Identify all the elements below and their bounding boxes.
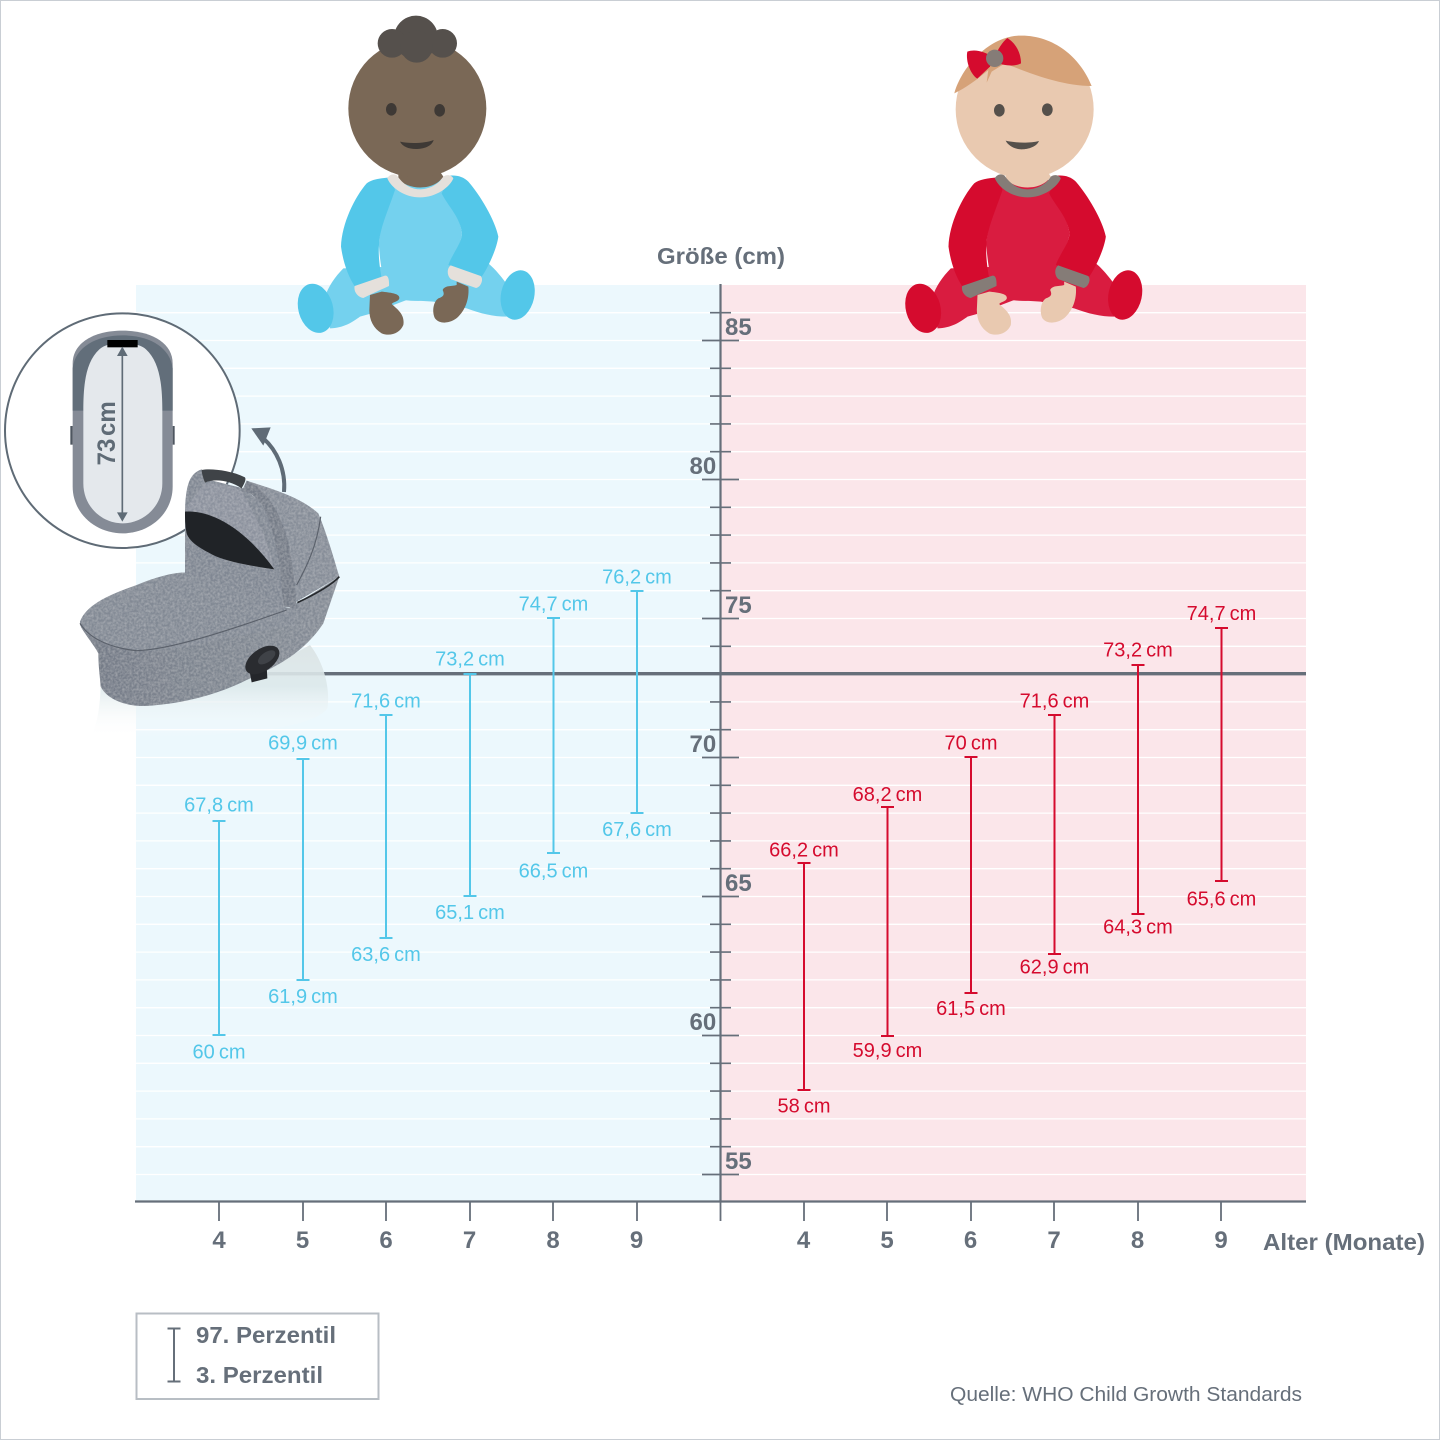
boys range: month 7: 73,2 cm	[435, 648, 505, 670]
girl bow	[967, 38, 1021, 79]
boy left hand	[369, 292, 404, 335]
inset: carrycot top view with 73 cm length	[5, 313, 240, 548]
y axis numbers: 60	[690, 1009, 716, 1036]
boy neck	[398, 167, 443, 187]
girls range: month 5: 59,9 cm	[853, 1040, 922, 1062]
legend	[136, 1314, 378, 1399]
x axis numbers: girls: 9	[1214, 1227, 1228, 1254]
girl right sleeve	[1049, 176, 1106, 277]
boy hair	[378, 16, 457, 63]
boy left cuff	[354, 276, 389, 298]
boys range: month 8: 74,7 cm	[519, 594, 588, 616]
boys range: month 7	[435, 648, 505, 924]
y axis with ticks	[702, 284, 739, 1201]
x axis numbers: girls: 5	[880, 1227, 894, 1254]
girl collar	[995, 174, 1061, 197]
y axis numbers: 85	[725, 314, 752, 341]
x axis numbers: girls: 4	[797, 1227, 811, 1254]
girl legs	[932, 263, 1121, 328]
boy head	[348, 39, 486, 177]
cot floor shadow	[90, 645, 328, 738]
boys range: month 5	[268, 732, 338, 1008]
girls range: month 8	[1103, 640, 1173, 938]
boys range: month 7: 65,1 cm	[435, 902, 505, 924]
boys range: month 4: 60 cm	[193, 1042, 245, 1064]
cot seams	[80, 517, 321, 651]
girl head	[956, 40, 1094, 178]
x axis numbers: boys: 9	[630, 1227, 643, 1254]
girls range: month 6: 61,5 cm	[936, 998, 1006, 1020]
girl right foot	[1104, 267, 1147, 323]
boy collar	[387, 174, 453, 197]
girl neck	[1006, 167, 1051, 187]
girls range: month 8: 73,2 cm	[1103, 640, 1173, 662]
x axis with ticks	[135, 1201, 1306, 1221]
boys range: month 6: 63,6 cm	[351, 944, 421, 966]
inset: carrycot top view with 73 cm length: 73 cm	[93, 401, 121, 465]
boys range: month 6	[351, 690, 421, 966]
girls range: month 9	[1187, 603, 1256, 910]
boys range: month 6: 71,6 cm	[351, 690, 421, 712]
boy right sleeve	[442, 176, 498, 277]
y axis numbers	[690, 314, 752, 1175]
axis title: height: Größe (cm)	[657, 243, 785, 269]
x axis numbers: girls	[797, 1227, 1228, 1254]
girl torso	[986, 180, 1069, 301]
girls range: month 8: 64,3 cm	[1103, 916, 1173, 938]
girls range: month 9: 65,6 cm	[1187, 888, 1256, 910]
x axis numbers: boys: 5	[296, 1227, 309, 1254]
x axis numbers: boys: 4	[212, 1227, 226, 1254]
girl left hand	[977, 292, 1011, 335]
carrycot photo	[80, 469, 339, 738]
y axis numbers: 65	[725, 870, 752, 897]
cot window	[185, 512, 274, 569]
x axis numbers: boys: 8	[546, 1227, 560, 1254]
x axis numbers: girls: 6	[964, 1227, 977, 1254]
boy mouth	[400, 140, 434, 149]
cot handle	[202, 469, 245, 488]
girl hair	[954, 36, 1092, 93]
girl left foot	[900, 280, 946, 337]
girl head with hair and bow	[954, 36, 1094, 178]
arrow: carrycot to inset	[251, 427, 284, 492]
y axis numbers: 75	[725, 592, 752, 619]
boys range: month 9: 76,2 cm	[602, 566, 672, 588]
boys range: month 5: 61,9 cm	[268, 986, 338, 1008]
girls range: month 4	[769, 840, 839, 1118]
cot knob	[240, 640, 284, 682]
boy left sleeve	[341, 177, 395, 287]
x axis numbers: boys	[212, 1227, 643, 1254]
boys range: month 8	[519, 594, 588, 882]
girls range: month 5: 68,2 cm	[853, 784, 922, 806]
girl mouth	[1006, 141, 1039, 149]
x axis numbers: boys: 6	[379, 1227, 393, 1254]
girls range: month 6: 70 cm	[945, 732, 997, 754]
cot fabric	[80, 469, 339, 706]
boy right hand	[433, 282, 469, 323]
girl left sleeve	[948, 177, 1002, 287]
x axis numbers: boys: 7	[463, 1227, 476, 1254]
boy left foot	[292, 280, 339, 337]
x axis numbers: girls: 7	[1047, 1227, 1061, 1254]
girls range: month 6	[936, 732, 1006, 1020]
panel: boys background	[136, 285, 720, 1201]
girls range: month 9: 74,7 cm	[1187, 603, 1256, 625]
girls range: month 7: 62,9 cm	[1020, 956, 1089, 978]
boys range: month 9	[602, 566, 672, 841]
boys range: month 4: 67,8 cm	[184, 794, 254, 816]
boy eyes	[386, 103, 445, 117]
boys range: month 9: 67,6 cm	[602, 819, 672, 841]
baby girl	[900, 167, 1147, 337]
panel: girls background	[720, 285, 1306, 1201]
y axis numbers: 70	[690, 731, 716, 758]
cot zipper	[297, 577, 339, 603]
girl eyes	[994, 103, 1053, 117]
x axis numbers: girls: 8	[1131, 1227, 1144, 1254]
reference line: 73 cm	[262, 672, 1306, 675]
girls range: month 7	[1020, 690, 1089, 978]
y axis numbers: 80	[690, 453, 716, 480]
girls range: month 7: 71,6 cm	[1020, 690, 1089, 712]
boys range: month 8: 66,5 cm	[519, 860, 588, 882]
boys range: month 4	[184, 794, 254, 1064]
boy torso	[379, 180, 462, 301]
girl right cuff	[1055, 265, 1090, 288]
source note: Quelle: WHO Child Growth Standards	[950, 1384, 1302, 1406]
girls range: month 5	[853, 784, 922, 1062]
boy right cuff	[448, 265, 482, 288]
girls range: month 4: 66,2 cm	[769, 840, 839, 862]
y axis numbers: 55	[725, 1148, 752, 1175]
girl left cuff	[962, 276, 997, 298]
girl right hand	[1041, 282, 1076, 323]
boys range: month 5: 69,9 cm	[268, 732, 338, 754]
legend: 3. Perzentil	[196, 1362, 323, 1388]
baby boy	[292, 16, 539, 337]
boy right foot	[496, 267, 539, 323]
legend: 97. Perzentil	[196, 1322, 336, 1348]
axis title: age: Alter (Monate)	[1263, 1229, 1425, 1255]
girls range: month 4: 58 cm	[778, 1096, 830, 1118]
boy legs	[325, 263, 513, 328]
